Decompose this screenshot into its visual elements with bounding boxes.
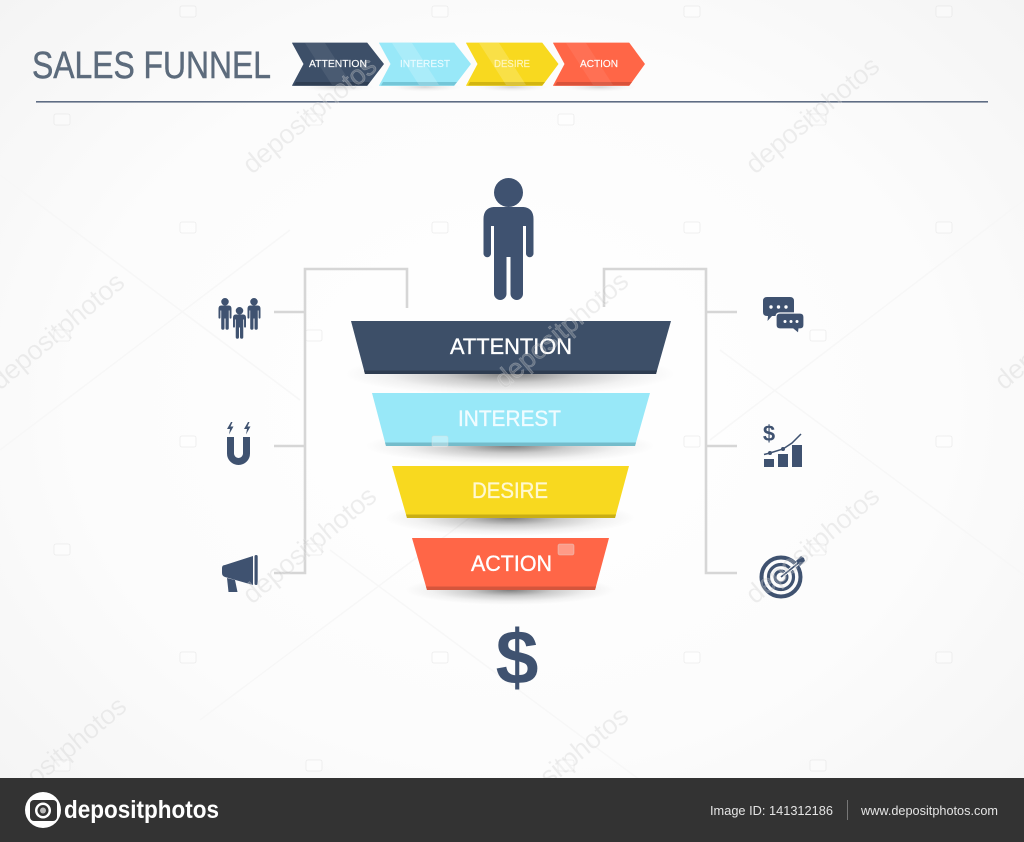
chevron: desire xyxy=(466,43,558,92)
footer brand name: depositphotos xyxy=(64,796,219,824)
funnel tier: interest: INTEREST xyxy=(458,406,561,431)
left connector lines xyxy=(274,269,407,573)
icon: people group xyxy=(218,298,260,339)
process chevrons xyxy=(292,43,644,92)
header rule xyxy=(36,101,988,103)
funnel tier: action: ACTION xyxy=(471,551,552,576)
right connector lines xyxy=(604,269,737,573)
funnel xyxy=(345,321,675,605)
watermarks: depositphotos xyxy=(740,481,885,610)
chevron: action: ACTION xyxy=(580,58,618,70)
funnel tier: desire xyxy=(385,466,635,536)
watermarks: depositphotos xyxy=(489,701,634,830)
chevron: attention: ATTENTION xyxy=(309,58,367,70)
funnel tier: desire: DESIRE xyxy=(472,478,548,503)
watermarks: depositphotos xyxy=(237,51,382,180)
chevron: interest: INTEREST xyxy=(400,58,451,70)
icon: dollar sign: $ xyxy=(496,615,538,701)
website url: www.depositphotos.com xyxy=(860,804,998,818)
chevron: interest xyxy=(380,43,470,92)
image id: Image ID: 141312186 xyxy=(710,804,833,818)
chevron: action xyxy=(554,43,644,92)
icon: target xyxy=(762,556,805,596)
icon: growth chart xyxy=(763,421,802,467)
icon: person xyxy=(484,178,534,300)
funnel tier: interest xyxy=(365,393,655,464)
chevron: attention xyxy=(292,43,384,92)
funnel tier: attention: ATTENTION xyxy=(450,334,572,359)
icon: growth chart: $ xyxy=(763,421,775,446)
footer bar xyxy=(0,778,1024,842)
watermarks: depositphotos xyxy=(237,481,382,610)
icon: megaphone xyxy=(222,555,258,592)
chevron: desire: DESIRE xyxy=(494,58,530,70)
watermarks: depositphotos xyxy=(740,51,885,180)
footer logo icon xyxy=(25,792,61,828)
title: SALES FUNNEL xyxy=(32,45,271,87)
icon: magnet xyxy=(227,422,250,462)
funnel tier: action xyxy=(405,538,615,605)
funnel tier: attention xyxy=(345,321,675,396)
icon: chat bubbles xyxy=(763,297,804,334)
watermarks: depositphotos xyxy=(489,266,634,395)
